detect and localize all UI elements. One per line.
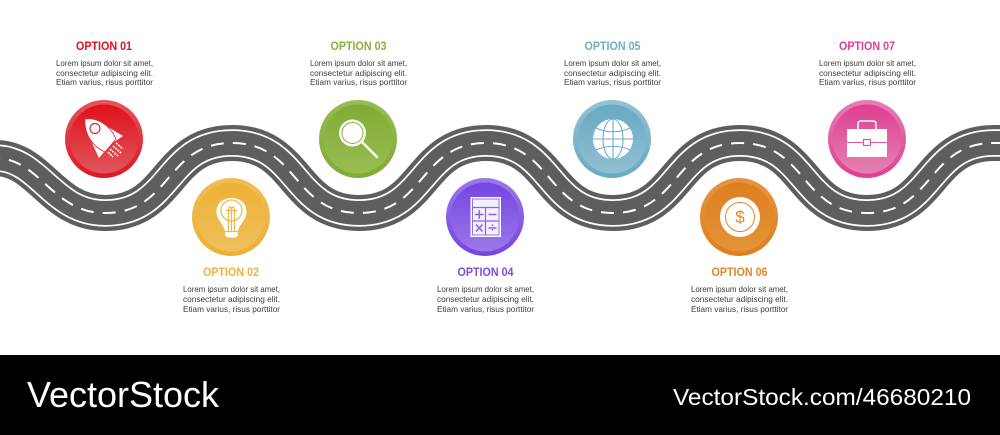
option 07 text: Lorem ipsum dolor sit amet, (819, 58, 916, 68)
option 05 heading: OPTION 05 (584, 41, 641, 53)
option 06 badge with dollar coin icon (700, 178, 778, 256)
option 03 text: Lorem ipsum dolor sit amet, (310, 58, 407, 68)
option 06 heading: OPTION 06 (712, 267, 768, 279)
option 02 text: consectetur adipiscing elit. (183, 294, 280, 304)
winding road (0, 143, 1000, 213)
option 01 heading: OPTION 01 (76, 41, 133, 53)
option 06 text: Etiam varius, risus porttitor (691, 304, 788, 314)
option 04 heading: OPTION 04 (458, 267, 514, 279)
option 07 text (819, 58, 916, 87)
option 05 text: consectetur adipiscing elit. (564, 68, 661, 78)
option 01 text: Etiam varius, risus porttitor (56, 77, 153, 87)
option 07 text: Etiam varius, risus porttitor (819, 77, 916, 87)
option 05 text (564, 58, 661, 87)
option 07 heading: OPTION 07 (839, 41, 895, 53)
option 01 badge with rocket icon (65, 100, 143, 178)
option 03 badge with magnifier icon (319, 100, 397, 178)
option 05 text: Etiam varius, risus porttitor (564, 77, 661, 87)
option 02 badge with light bulb icon (192, 178, 270, 256)
option 06 badge with dollar coin icon: $ (735, 208, 745, 226)
option 03 text (310, 58, 407, 87)
option 07 badge with briefcase icon (828, 100, 906, 178)
option 04 text: consectetur adipiscing elit. (437, 294, 534, 304)
option 05 badge with globe icon (573, 100, 651, 178)
option 07 text: consectetur adipiscing elit. (819, 68, 916, 78)
option 03 heading: OPTION 03 (330, 41, 386, 53)
footer bar (0, 355, 1000, 435)
option 01 text: consectetur adipiscing elit. (56, 68, 153, 78)
option 06 text: Lorem ipsum dolor sit amet, (691, 284, 788, 294)
option 01 text: Lorem ipsum dolor sit amet, (56, 58, 153, 68)
option 02 text (183, 284, 280, 314)
option 03 text: consectetur adipiscing elit. (310, 68, 407, 78)
option 02 heading: OPTION 02 (203, 267, 259, 279)
option 02 text: Etiam varius, risus porttitor (183, 304, 280, 314)
option 02 text: Lorem ipsum dolor sit amet, (183, 284, 280, 294)
option 05 text: Lorem ipsum dolor sit amet, (564, 58, 661, 68)
option 06 text: consectetur adipiscing elit. (691, 294, 788, 304)
option 06 text (691, 284, 788, 314)
footer logo: VectorStock (27, 374, 220, 415)
option 04 text: Etiam varius, risus porttitor (437, 304, 534, 314)
option 03 text: Etiam varius, risus porttitor (310, 77, 407, 87)
option 01 text (56, 58, 153, 87)
footer url: VectorStock.com/46680210 (673, 384, 971, 410)
option 04 text (437, 284, 534, 314)
option 04 text: Lorem ipsum dolor sit amet, (437, 284, 534, 294)
option 04 badge with calculator icon (446, 178, 524, 256)
